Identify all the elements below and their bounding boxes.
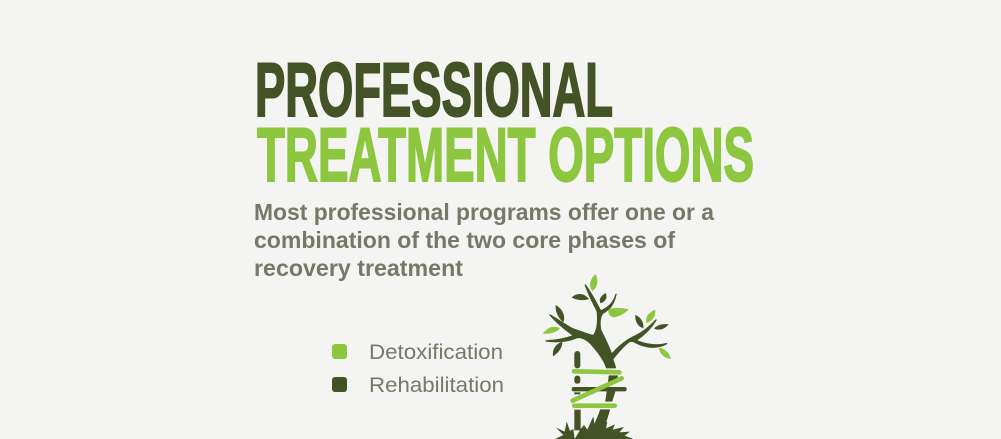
icon: bandaged tree: [543, 274, 671, 439]
title line: Professional: PROFESSIONAL: [255, 48, 613, 133]
grass: [555, 416, 633, 439]
stake: [572, 351, 627, 430]
intro text: [254, 199, 714, 281]
legend item: Detoxification: Detoxification: [369, 341, 503, 364]
tree trunk and branches: [546, 285, 667, 431]
bandage wraps: [573, 371, 622, 406]
intro text: recovery treatment: [254, 255, 463, 281]
dark leaves: [553, 293, 669, 356]
title: [255, 48, 754, 198]
light leaves: [543, 274, 671, 359]
intro text: combination of the two core phases of: [254, 227, 675, 253]
legend item: Rehabilitation: Rehabilitation: [369, 374, 504, 397]
intro text: Most professional programs offer one or a: [254, 199, 714, 225]
legend: [332, 341, 504, 397]
